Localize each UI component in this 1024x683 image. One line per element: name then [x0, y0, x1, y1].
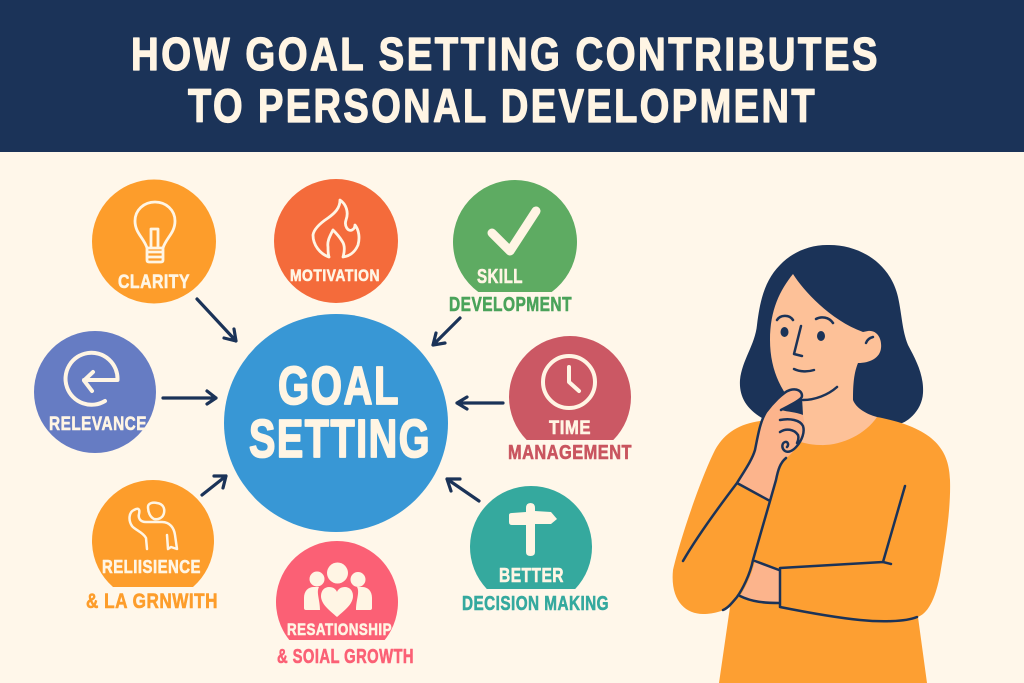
- icon: person raising arm: [130, 503, 177, 549]
- outline strokes: [683, 389, 917, 621]
- arrow: clarity to goal setting: [197, 299, 236, 341]
- node: skill development: [449, 180, 577, 316]
- icon: people with heart: [304, 562, 372, 617]
- node: resilience: [86, 480, 218, 613]
- arrow: time management to goal setting: [457, 397, 503, 409]
- arrow: relevance to goal setting: [163, 391, 216, 404]
- node: relevance: RELEVANCE: [49, 414, 147, 435]
- lower hand: [740, 561, 779, 603]
- arrow: better decision making to goal setting: [447, 479, 479, 501]
- shadow under thumb: [781, 397, 803, 415]
- node: relevance: [34, 331, 156, 453]
- title line 1: HOW GOAL SETTING CONTRIBUTES: [131, 28, 880, 80]
- node: relationship: & SOIAL GROWTH: [277, 646, 414, 668]
- node: time management: MANAGEMENT: [508, 442, 632, 464]
- node: clarity: CLARITY: [118, 271, 190, 293]
- icon: return arrow: [66, 353, 118, 405]
- hair: [740, 245, 923, 424]
- arrow: skill development to goal setting: [433, 318, 460, 345]
- node: better decision making: DECISION MAKING: [462, 593, 609, 615]
- face and neck: [770, 274, 881, 445]
- node: better decision making: BETTER: [499, 565, 564, 587]
- title line 2: TO PERSONAL DEVELOPMENT: [188, 79, 817, 132]
- node: motivation: [274, 179, 398, 303]
- node: motivation: MOTIVATION: [290, 266, 380, 285]
- sweater: [673, 417, 950, 683]
- node: resilience: RELIISIENCE: [102, 557, 201, 577]
- node: clarity: [92, 180, 216, 304]
- node: skill development: SKILL: [477, 266, 523, 288]
- title banner: [0, 0, 1024, 152]
- node: skill development: DEVELOPMENT: [449, 294, 572, 316]
- central circle: goal setting: [224, 314, 448, 532]
- icon: light bulb: [135, 202, 175, 262]
- node: relationship: [276, 541, 414, 668]
- node: time management: [508, 336, 632, 464]
- icon: flame: [313, 200, 359, 257]
- node: time management: TIME: [549, 418, 591, 439]
- icon: check mark: [492, 211, 536, 251]
- central circle: goal setting: GOAL: [278, 357, 400, 416]
- arrow: resilience to goal setting: [202, 476, 226, 495]
- node: resilience: & LA GRNWITH: [86, 590, 218, 613]
- icon: clock: [543, 356, 595, 408]
- central circle: goal setting: SETTING: [249, 410, 431, 469]
- node: better decision making: [462, 486, 609, 615]
- icon: signpost: [509, 503, 557, 556]
- facial features: [777, 316, 873, 400]
- illustration: thinking woman: [673, 245, 950, 683]
- node: relationship: RESATIONSHIP: [287, 620, 392, 639]
- raised hand: [737, 389, 804, 501]
